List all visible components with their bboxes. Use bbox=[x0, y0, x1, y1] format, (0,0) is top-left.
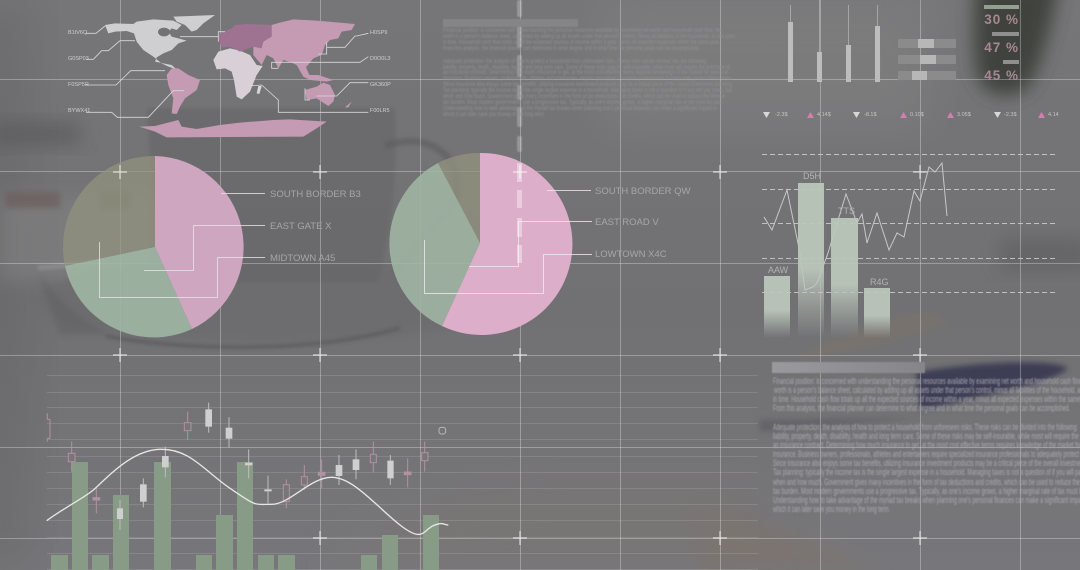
pie labels: LOWTOWN X4C bbox=[595, 249, 667, 260]
paragraphs bbox=[442, 27, 735, 118]
map labels: D0O0L3 bbox=[370, 56, 390, 62]
slice: khaki bbox=[438, 153, 480, 243]
bar labels: AAW bbox=[768, 265, 789, 275]
island: New Zealand bbox=[345, 102, 352, 107]
ticker row: -2.3$ bbox=[775, 112, 788, 118]
paragraphs: Since insurance also enjoys some tax benefits, utilizing insurance investment products may be a critical piece of the overall investment planning. bbox=[443, 81, 733, 88]
chart: top candlesticks bbox=[788, 0, 880, 82]
bar labels: R4G bbox=[870, 277, 889, 287]
candlesticks bbox=[47, 403, 446, 530]
map labels bbox=[68, 30, 391, 114]
continent: Africa bbox=[213, 48, 263, 99]
continent: Antarctica bbox=[139, 119, 327, 137]
continent: North America bbox=[105, 19, 187, 69]
bar labels: D5H bbox=[803, 171, 821, 181]
pie labels: EAST ROAD V bbox=[595, 217, 659, 228]
continent: Australia bbox=[305, 83, 335, 106]
panel: percentage readouts: 30 % bbox=[984, 12, 1019, 27]
ticker row: 3.05$ bbox=[957, 112, 971, 118]
map labels: B1tV6Q bbox=[68, 30, 88, 36]
panel: top financial text bbox=[442, 19, 735, 118]
continent: Europe and western Russia bbox=[218, 24, 272, 52]
bar labels: TTS bbox=[838, 206, 855, 216]
slice: green bbox=[389, 163, 480, 326]
paragraphs: insurance. Business owners, professionals, athletes and entertainers require specialized insurance professionals to adequately protect themselves. bbox=[443, 75, 732, 82]
map labels: GK360P bbox=[370, 82, 391, 88]
paragraphs: in time. Household cash flow totals up all the expected sources of income within a year, minus all expected expenses within the same year. bbox=[443, 39, 720, 46]
leader lines bbox=[424, 190, 592, 294]
ticker row: 4.14$ bbox=[817, 112, 831, 118]
ticker row: -2.3$ bbox=[1004, 112, 1017, 118]
green volume bars bbox=[51, 462, 439, 570]
map connector lines bbox=[86, 26, 368, 117]
panel: world map bbox=[68, 15, 391, 137]
paragraphs: Understanding how to take advantage of the myriad tax breaks when planning one's personal finances can make a significant impact in bbox=[443, 105, 717, 112]
paragraphs: Adequate protection: the analysis of how to protect a household from unforeseen risks. These risks can be divided into the following: bbox=[443, 58, 707, 65]
chart: bars and line right bbox=[762, 154, 1056, 338]
chart: pie one bbox=[63, 156, 361, 337]
slice: green bbox=[65, 247, 192, 337]
ticker row: 0.10$ bbox=[910, 112, 924, 118]
bars bbox=[764, 183, 890, 338]
pie labels bbox=[595, 186, 691, 260]
pie labels: EAST GATE X bbox=[270, 221, 332, 232]
panel: lower right financial text bbox=[772, 362, 1080, 514]
paragraphs: tax burden. Most modern governments use a progressive tax. Typically, as one's income grows, a higher marginal rate of tax must be paid. bbox=[443, 99, 723, 106]
panel: percentage readouts: 47 % bbox=[984, 40, 1019, 55]
leader lines bbox=[100, 194, 265, 298]
paragraphs: liability, property, death, disability, health and long term care. Some of these risks may be self-insurable, while most will require the purchase of bbox=[443, 64, 730, 71]
pie labels: SOUTH BORDER QW bbox=[595, 186, 691, 197]
paragraphs: Tax planning: typically the income tax is the single largest expense in a household. Managing taxes is not a question of if you will pay taxes, but bbox=[443, 87, 732, 94]
pie labels: SOUTH BORDER B3 bbox=[270, 189, 361, 200]
ticker row bbox=[763, 112, 1059, 118]
bar labels bbox=[768, 171, 889, 287]
ticker row: 4.14 bbox=[1048, 112, 1059, 118]
map labels: F00LR5 bbox=[370, 108, 390, 114]
title bar bbox=[772, 362, 925, 373]
paragraphs: Financial position: is concerned with understanding the personal resources available by examining net worth and household cash flow. Net bbox=[443, 27, 722, 34]
paragraphs: which it can later save you money in the long term. bbox=[442, 111, 545, 118]
paragraphs: which it can later save you money in the long term. bbox=[772, 504, 890, 514]
continent: Asia bbox=[253, 19, 355, 68]
ticker row: -8.1$ bbox=[864, 112, 877, 118]
Hudson Bay bbox=[158, 28, 170, 36]
chart: lower left bars, candlesticks and curve bbox=[47, 403, 448, 570]
chart: horizontal segmented bars bbox=[898, 39, 956, 80]
map labels: F0SP5R bbox=[68, 82, 89, 88]
paragraphs: an insurance contract. Determining how much insurance to get, at the most cost effective terms requires knowledge of the market for personal bbox=[443, 69, 728, 76]
trend curve bbox=[47, 449, 448, 534]
paragraphs: worth is a person's balance sheet, calculated by adding up all assets under that person's control, minus all liabilities of the household, at one point bbox=[442, 33, 735, 40]
map labels: G0SP03 bbox=[68, 56, 89, 62]
continent: South America bbox=[167, 68, 200, 114]
faint horizontal chart rules bbox=[47, 376, 758, 570]
pie labels bbox=[270, 189, 361, 264]
chart: pie two bbox=[389, 153, 691, 335]
thick dashed vertical line bbox=[517, 0, 522, 152]
map labels: BYWX41 bbox=[68, 108, 90, 114]
slice: pink bbox=[155, 156, 244, 329]
dashes over pie bbox=[517, 163, 522, 263]
crosshair markers bbox=[113, 165, 927, 545]
title bar bbox=[443, 19, 578, 27]
paragraphs: From this analysis, the financial planner can determine to what degree and in what time the personal goals can be accomplished. bbox=[443, 45, 700, 52]
panel: percentage readouts bbox=[984, 5, 1019, 83]
dashed rules bbox=[762, 154, 1056, 292]
paragraphs bbox=[772, 376, 1080, 514]
slice: pink bbox=[442, 153, 572, 335]
continent: Greenland bbox=[173, 15, 215, 32]
pie labels: MIDTOWN A45 bbox=[270, 253, 335, 264]
panel: percentage readouts: 45 % bbox=[984, 68, 1019, 83]
line series bbox=[764, 163, 947, 290]
continent: Southeast Asia islands bbox=[297, 65, 333, 82]
island: Madagascar bbox=[257, 86, 262, 94]
map labels: H0SP9 bbox=[370, 30, 387, 36]
paragraphs: when and how much. Government gives many incentives in the form of tax deductions and credits, which can be used to reduce the lifetime bbox=[442, 93, 725, 100]
slice: khaki bbox=[63, 156, 155, 266]
